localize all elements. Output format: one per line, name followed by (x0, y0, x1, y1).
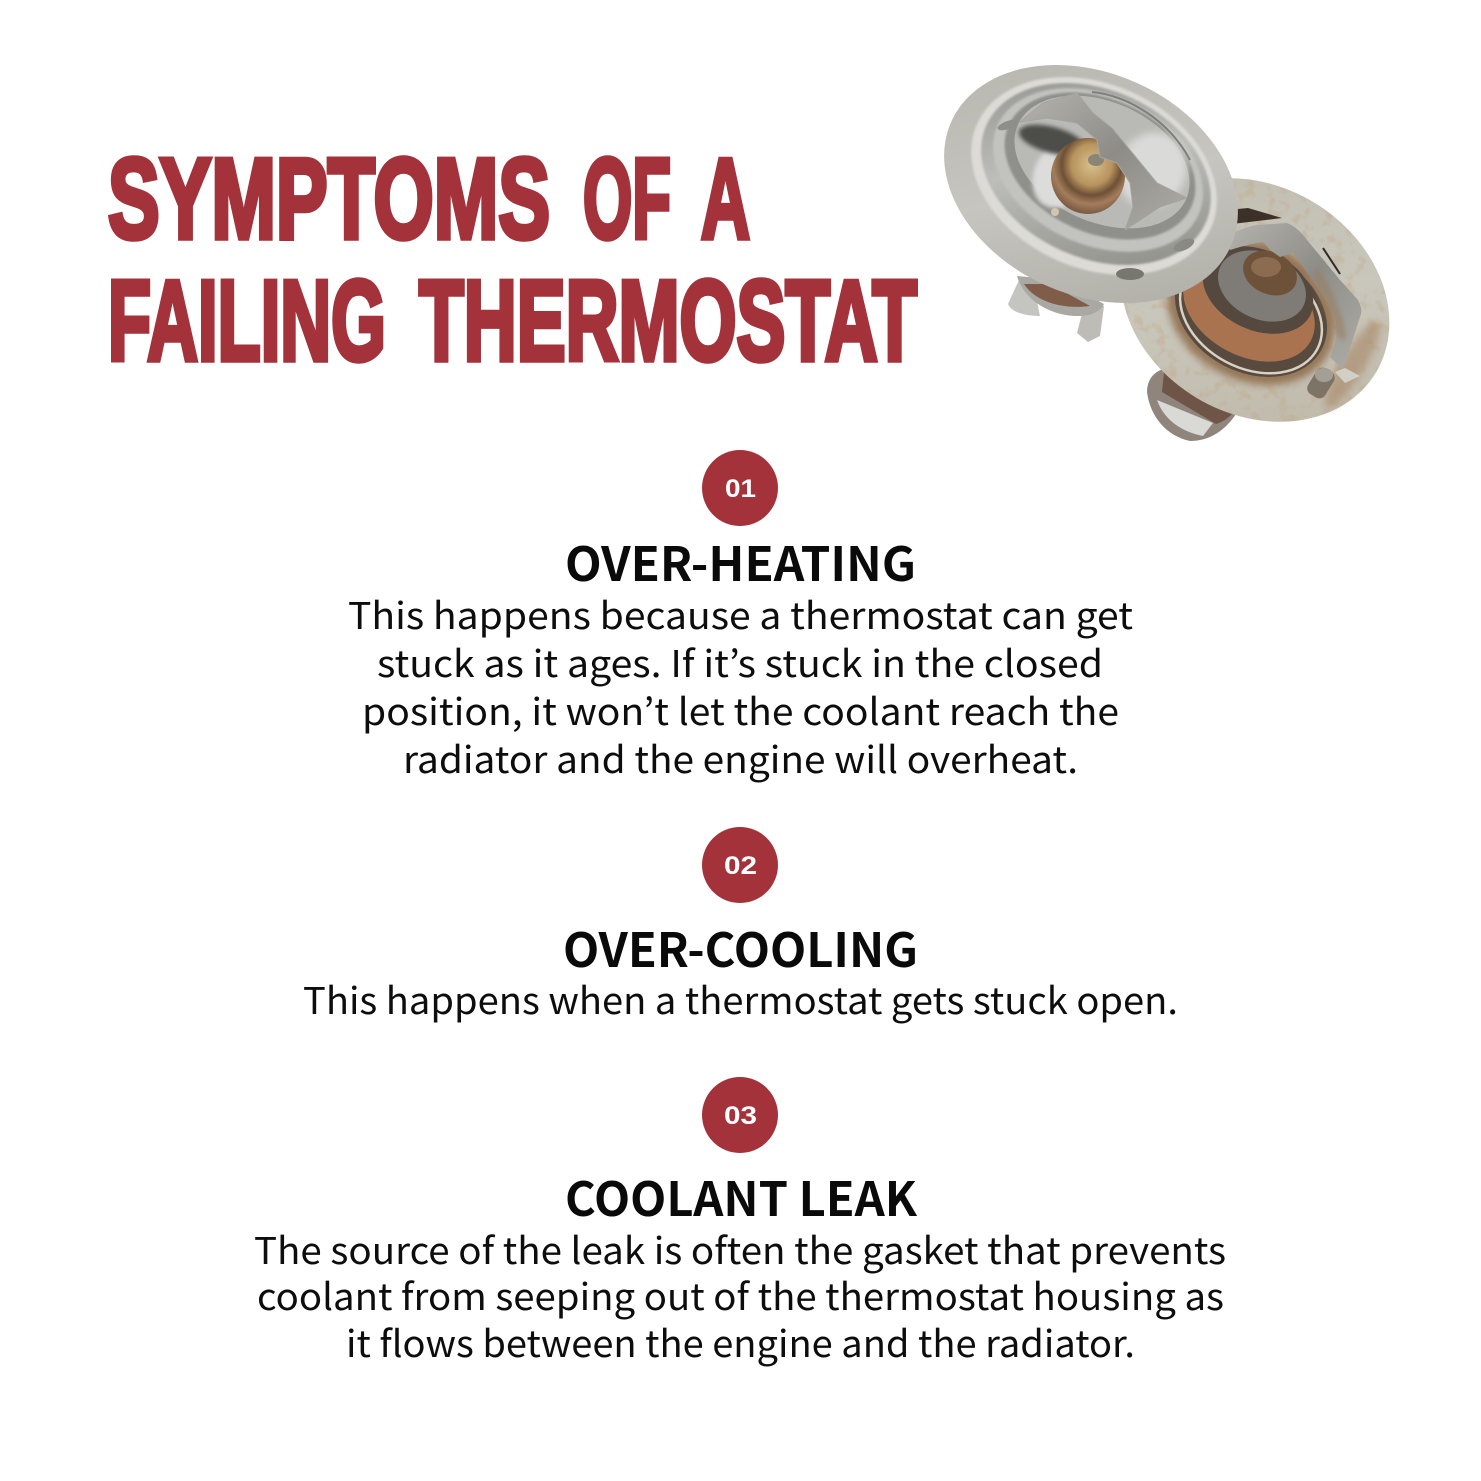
body text: coolant leak: The source of the leak is often the gasket that prevents (254, 1221, 1226, 1275)
body text: coolant leak (254, 1221, 1226, 1368)
title: THERMOSTAT (419, 258, 917, 385)
title: A (701, 136, 750, 263)
number badge 01 (702, 450, 778, 526)
body text: over-heating: This happens because a thermostat can get (348, 586, 1133, 640)
body text: coolant leak: it flows between the engine and the radiator. (346, 1314, 1135, 1368)
title: OF (583, 136, 671, 263)
number badge 02: 02 (724, 852, 757, 880)
image: new and rusty thermostats (944, 65, 1390, 441)
number badge 03 (702, 1077, 778, 1153)
heading: over-heating: OVER-HEATING (565, 526, 916, 595)
title: SYMPTOMS (108, 136, 550, 263)
number badge 02 (702, 827, 778, 903)
symptom 3: coolant leak (254, 1077, 1226, 1368)
number badge 03: 03 (724, 1102, 757, 1130)
symptom 2: over-cooling (303, 827, 1178, 1025)
symptom 1: over-heating (348, 450, 1133, 784)
number badge 01: 01 (725, 475, 756, 503)
title (108, 136, 917, 385)
new thermostat (906, 20, 1276, 348)
rusty thermostat (1124, 178, 1390, 441)
body text: over-heating: position, it won’t let the coolant reach the (362, 682, 1119, 736)
heading: coolant leak: COOLANT LEAK (565, 1161, 918, 1230)
body text: over-heating: stuck as it ages. If it’s stuck in the closed (377, 634, 1103, 688)
body text: over-heating (348, 586, 1133, 784)
body text: coolant leak: coolant from seeping out of the thermostat housing as (257, 1267, 1224, 1321)
body text: over-heating: radiator and the engine will overheat. (403, 730, 1078, 784)
body text: over-cooling: This happens when a thermostat gets stuck open. (303, 971, 1178, 1025)
heading: over-cooling: OVER-COOLING (563, 912, 918, 981)
title: FAILING (108, 258, 386, 385)
